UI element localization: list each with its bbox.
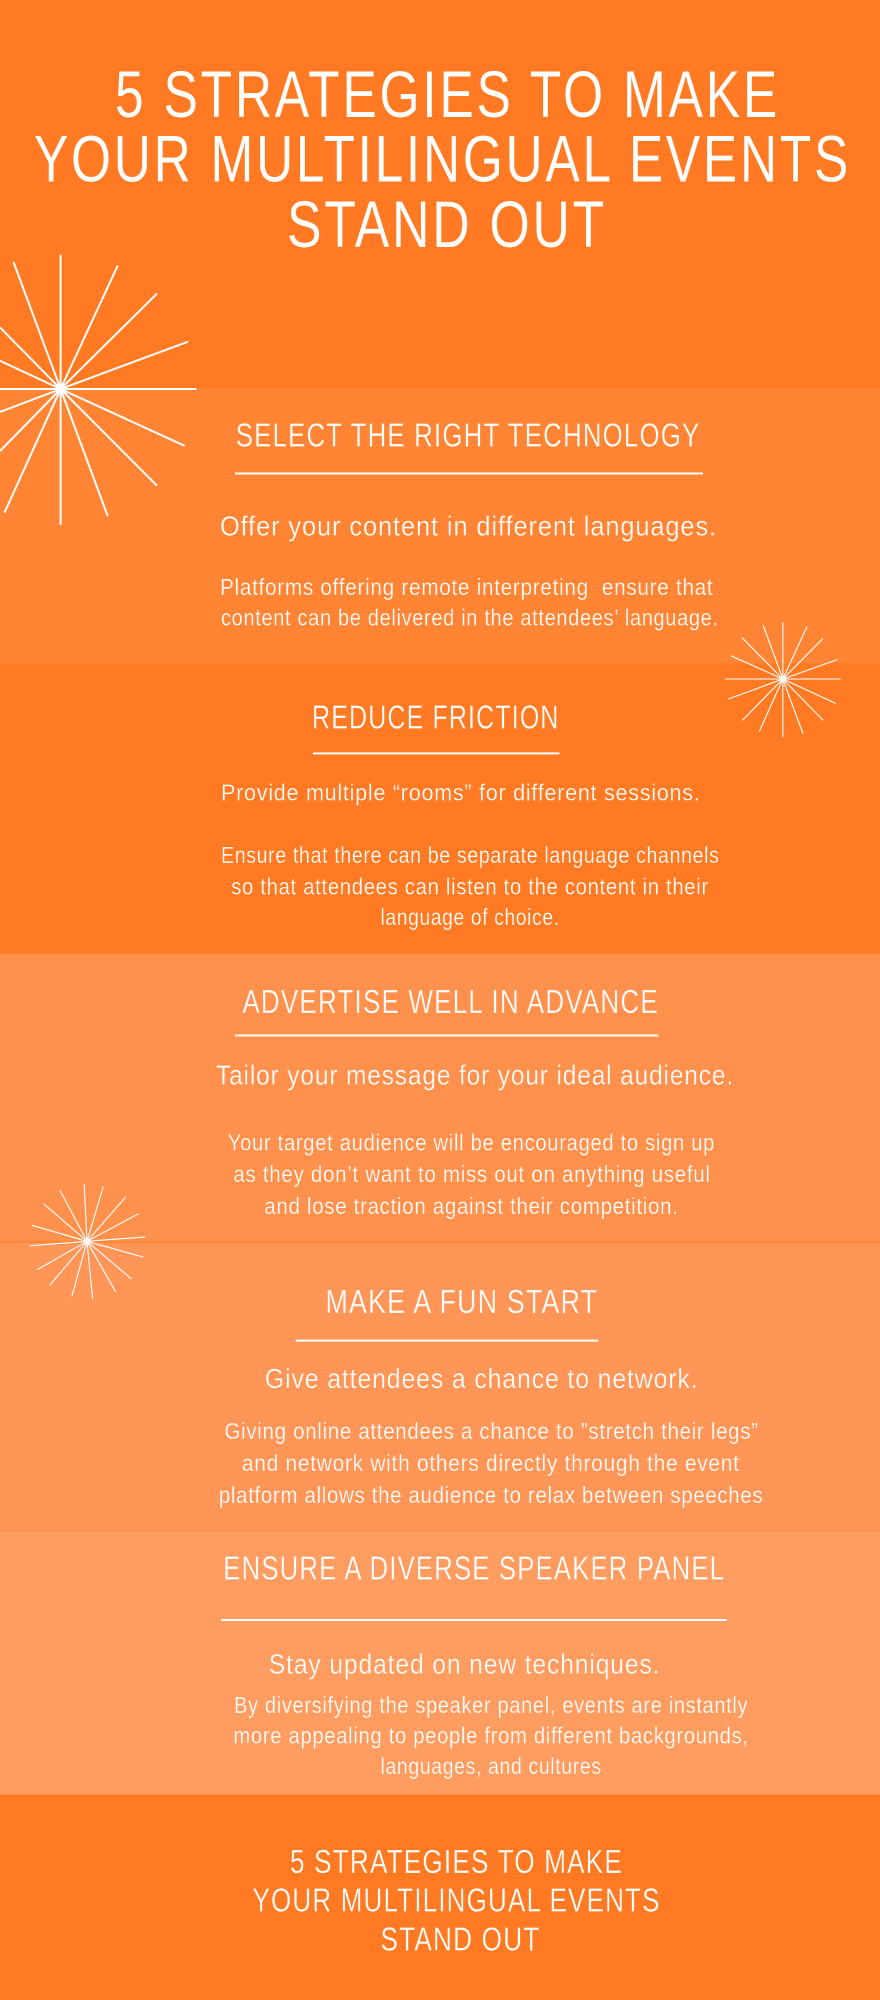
body text [233, 1692, 749, 1779]
footer title: 5 STRATEGIES TO MAKE [290, 1843, 623, 1880]
panel: select the right technology [0, 388, 880, 664]
footer title: YOUR MULTILINGUAL EVENTS [252, 1882, 661, 1919]
body text: By diversifying the speaker panel, events are instantly [234, 1692, 748, 1718]
body text: and lose traction against their competition. [264, 1193, 679, 1219]
panel: header [0, 0, 880, 388]
band background [0, 1531, 880, 1795]
body text: Ensure that there can be separate language channels [221, 842, 720, 868]
body text: Platforms offering remote interpreting ensure that [220, 574, 713, 600]
panel: footer [0, 1795, 880, 2000]
title [34, 57, 851, 261]
header background [0, 0, 880, 388]
icon: large starburst [0, 255, 196, 525]
panel: make a fun start [0, 1241, 880, 1531]
body text: platform allows the audience to relax between speeches [219, 1482, 763, 1508]
body text [228, 1129, 715, 1219]
heading: ENSURE A DIVERSE SPEAKER PANEL [223, 1550, 725, 1586]
subheading: Provide multiple “rooms” for different sessions. [221, 780, 700, 806]
heading: MAKE A FUN START [326, 1283, 598, 1320]
subheading: Tailor your message for your ideal audience. [216, 1060, 734, 1091]
body text: Giving online attendees a chance to ”stretch their legs” [224, 1418, 759, 1444]
band background [0, 388, 880, 664]
body text: and network with others directly through the event [242, 1450, 740, 1476]
body text [221, 842, 720, 930]
icon: upper right starburst [725, 622, 841, 737]
body text: language of choice. [380, 904, 560, 930]
body text: more appealing to people from different backgrounds, [233, 1722, 749, 1748]
body text: Your target audience will be encouraged to sign up [228, 1129, 715, 1155]
heading: SELECT THE RIGHT TECHNOLOGY [236, 417, 700, 454]
footer background [0, 1795, 880, 2000]
band background [0, 954, 880, 1242]
footer title: STAND OUT [380, 1920, 540, 1957]
band background [0, 1242, 880, 1531]
title: STAND OUT [287, 187, 607, 261]
subheading: Give attendees a chance to network. [265, 1363, 698, 1394]
icon: lower left starburst [30, 1184, 145, 1299]
body text: so that attendees can listen to the content in their [231, 874, 709, 900]
subheading: Stay updated on new techniques. [269, 1649, 660, 1680]
band background [0, 664, 880, 954]
heading: REDUCE FRICTION [312, 698, 560, 735]
body text: content can be delivered in the attendees’ language. [221, 604, 719, 630]
body text [220, 574, 719, 630]
panel: reduce friction [0, 664, 880, 954]
panel: advertise well in advance [0, 954, 880, 1242]
body text: languages, and cultures [380, 1753, 602, 1779]
body text: as they don’t want to miss out on anything useful [233, 1161, 711, 1187]
heading: ADVERTISE WELL IN ADVANCE [242, 983, 659, 1020]
subheading: Offer your content in different languages. [220, 511, 717, 542]
footer title [252, 1843, 661, 1957]
body text [219, 1418, 763, 1508]
panel: ensure a diverse speaker panel [0, 1531, 880, 1795]
